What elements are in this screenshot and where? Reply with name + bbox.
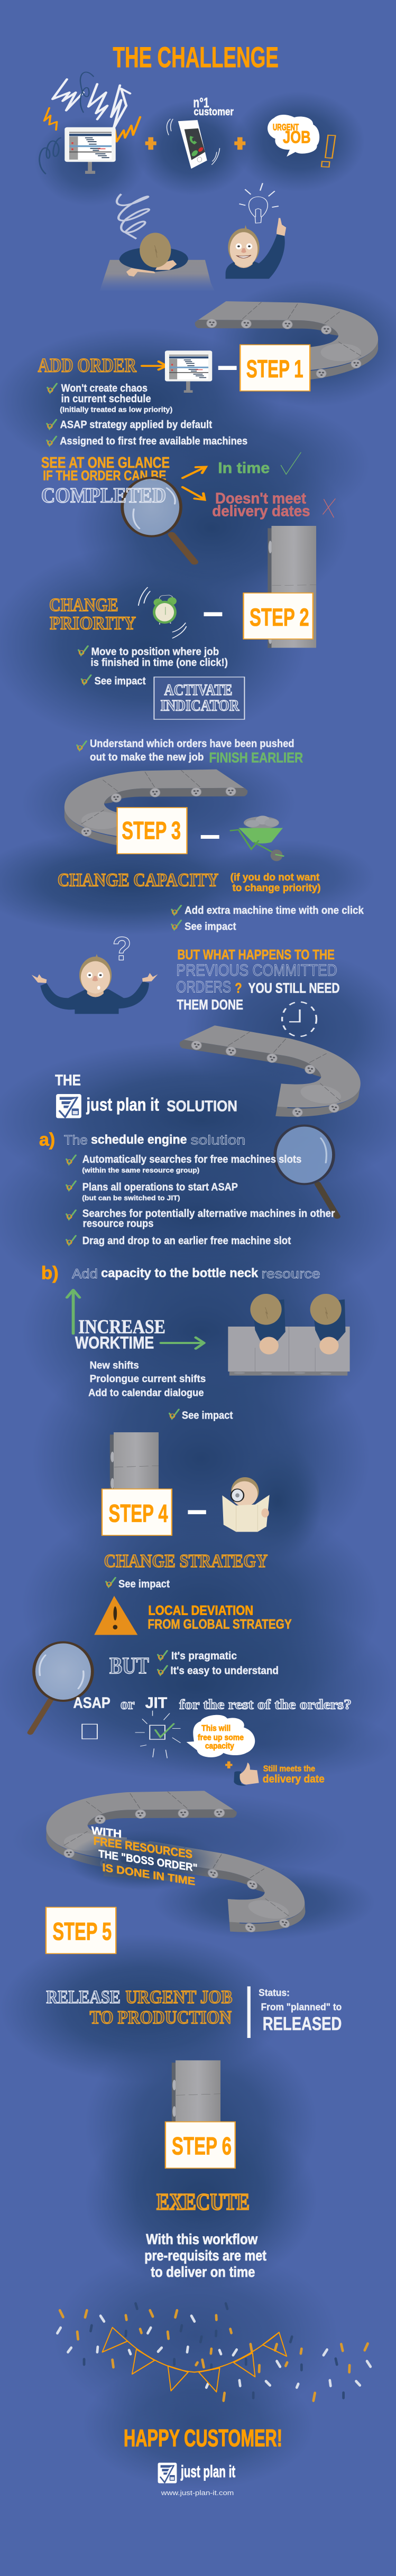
checklist: understand: FINISH EARLIER bbox=[209, 749, 303, 765]
checklist: move and see impact: See impact bbox=[95, 675, 146, 687]
vertical conveyor bbox=[268, 526, 316, 648]
heading: release urgent job to production bbox=[46, 1987, 232, 2027]
text on conveyor: WITH bbox=[91, 1824, 122, 1840]
bunting bbox=[102, 2328, 287, 2392]
icon: question mark: ? bbox=[113, 930, 131, 967]
person: shrugging bbox=[32, 954, 158, 1014]
speech bubble: free up capacity: This will bbox=[201, 1723, 231, 1733]
status: released bbox=[259, 1987, 342, 2034]
list: worktime options: Add to calendar dialogue bbox=[88, 1387, 204, 1399]
vertical conveyor bbox=[172, 2060, 220, 2131]
section: step 2 change priority bbox=[49, 587, 313, 861]
heading: release urgent job to production: RELEASE bbox=[46, 1987, 121, 2007]
outcome: in time bbox=[218, 452, 301, 476]
question: previous committed orders bbox=[176, 947, 339, 1013]
heading: a) schedule engine solution bbox=[39, 1129, 245, 1150]
checklist: pragmatic: It's pragmatic bbox=[171, 1650, 237, 1662]
person: idea, raised finger bbox=[226, 218, 286, 279]
brand: just plan it solution: just plan it bbox=[86, 1095, 159, 1115]
checklist: add order bbox=[47, 382, 247, 447]
heading: see at one glance: IF THE ORDER CAN BE bbox=[43, 468, 166, 483]
icon: wheelbarrow bbox=[230, 816, 284, 861]
arrow: up bbox=[67, 1290, 79, 1333]
icon: thumbs up bbox=[234, 1763, 259, 1786]
arrow: right bbox=[161, 1338, 204, 1349]
heading: completed: COMPLETED bbox=[41, 483, 166, 507]
dash bbox=[188, 1510, 206, 1514]
step 4 badge: STEP 4 bbox=[108, 1499, 168, 1527]
heading: change priority: PRIORITY bbox=[50, 614, 136, 634]
outcome: misses delivery dates: Doesn't meet bbox=[215, 490, 306, 507]
check: see impact: See impact bbox=[182, 1410, 233, 1421]
checkbox: jit checked bbox=[135, 1711, 181, 1758]
checklist: understand bbox=[77, 738, 303, 765]
section: execute and happy customer bbox=[57, 2189, 371, 2497]
checklist: understand: out to make the new job bbox=[90, 752, 204, 763]
heading: change priority bbox=[49, 595, 136, 634]
heading: local deviation from global strategy: LOCAL DEVIATION bbox=[148, 1604, 253, 1618]
section: asap or jit bbox=[30, 1642, 352, 1943]
note: still meets delivery date bbox=[263, 1765, 325, 1785]
speech bubble: urgent job bbox=[268, 115, 319, 156]
button: activate indicator: ACTIVATE bbox=[164, 681, 232, 699]
heading: change priority: CHANGE bbox=[49, 595, 118, 615]
label: but: BUT bbox=[109, 1653, 149, 1679]
person: stressed head on desk bbox=[100, 194, 215, 291]
dash bbox=[204, 612, 222, 616]
warning triangle bbox=[94, 1596, 137, 1635]
question: previous committed orders: THEM DONE bbox=[177, 997, 243, 1013]
list: worktime options: Prolongue current shifts bbox=[90, 1373, 206, 1385]
section: step 1 add order bbox=[38, 301, 378, 648]
icon: dashed clock bbox=[282, 1002, 317, 1036]
website url: www.just-plan-it.com bbox=[161, 2489, 234, 2497]
text: workflow result bbox=[144, 2231, 266, 2280]
checklist: add order: (Initially treated as low priority) bbox=[60, 405, 172, 414]
note: if you do not want to change priority: to change priority) bbox=[232, 882, 321, 894]
step 6 badge bbox=[165, 2122, 235, 2168]
heading: a) schedule engine solution: a) bbox=[39, 1129, 55, 1150]
checklist: add order: ASAP strategy applied by default bbox=[60, 419, 213, 431]
heading: b) add capacity: capacity to the bottle neck bbox=[101, 1266, 259, 1280]
heading: execute: EXECUTE bbox=[156, 2189, 250, 2215]
speech bubble: free up capacity: free up some bbox=[198, 1733, 244, 1742]
heading: local deviation from global strategy bbox=[148, 1604, 292, 1632]
step 2 badge: STEP 2 bbox=[250, 604, 309, 632]
section: just plan it solution bbox=[39, 1094, 350, 1376]
plus bbox=[225, 1762, 232, 1768]
question: previous committed orders: ORDERS bbox=[176, 978, 231, 996]
heading: increase worktime: WORKTIME bbox=[75, 1333, 154, 1352]
heading: release urgent job to production: TO PRODUCTION bbox=[90, 2007, 232, 2027]
checklist: move and see impact: is finished in time (one click!) bbox=[90, 657, 228, 669]
heading: happy customer: HAPPY CUSTOMER! bbox=[124, 2425, 282, 2452]
step 1 badge: STEP 1 bbox=[246, 355, 303, 383]
heading: change capacity: CHANGE CAPACITY bbox=[58, 870, 218, 891]
heading: b) add capacity: b) bbox=[41, 1263, 59, 1283]
text on conveyor: FREE RESOURCES bbox=[94, 1834, 192, 1861]
brand logo: just plan it bbox=[180, 2463, 235, 2481]
section: step 5 release bbox=[46, 1907, 342, 2168]
step 2 badge bbox=[243, 593, 313, 639]
speech bubble: urgent job: URGENT bbox=[273, 122, 299, 133]
step 3 badge bbox=[117, 808, 187, 854]
label: the: THE bbox=[55, 1071, 81, 1089]
text on conveyor bbox=[91, 1824, 198, 1888]
heading: change strategy: CHANGE STRATEGY bbox=[104, 1551, 268, 1571]
arrow: in time bbox=[182, 467, 206, 478]
speech bubble: urgent job: JOB bbox=[283, 128, 311, 147]
label: no.1 customer bbox=[193, 96, 234, 118]
button: activate indicator: INDICATOR bbox=[160, 697, 240, 715]
magnifying glass bbox=[30, 1642, 93, 1732]
checklist: schedule engine: Drag and drop to an earlier free machine slot bbox=[82, 1235, 291, 1247]
question: asap or jit: JIT bbox=[145, 1694, 168, 1711]
check: see impact: See impact bbox=[118, 1578, 170, 1590]
checklist: add order: in current schedule bbox=[61, 393, 151, 405]
conveyor belt bbox=[65, 770, 247, 849]
note: still meets delivery date: delivery date bbox=[263, 1774, 325, 1785]
checklist: capacity: See impact bbox=[185, 921, 236, 932]
step 4 badge bbox=[102, 1489, 172, 1535]
plus bbox=[234, 137, 245, 150]
checklist: schedule engine: (but can be switched to JIT) bbox=[82, 1194, 180, 1202]
text: workflow result: to deliver on time bbox=[151, 2264, 255, 2280]
heading: increase worktime: INCREASE bbox=[78, 1315, 165, 1338]
icon: ringing phone bbox=[167, 119, 220, 169]
button: activate indicator bbox=[154, 677, 244, 719]
question: previous committed orders: ? bbox=[235, 980, 242, 996]
step 1 badge bbox=[240, 345, 310, 391]
speech bubble: free up capacity: capacity bbox=[205, 1741, 234, 1750]
icon: exclamation mark bbox=[321, 135, 335, 167]
heading: b) add capacity bbox=[41, 1263, 320, 1283]
checklist: schedule engine: Plans all operations to start ASAP bbox=[82, 1182, 238, 1193]
question: asap or jit bbox=[73, 1694, 352, 1712]
label: no.1 customer: customer bbox=[194, 106, 234, 118]
icon: schedule monitor bbox=[165, 350, 212, 393]
text on conveyor: THE "BOSS ORDER" bbox=[98, 1848, 198, 1874]
label: no.1 customer: n°1 bbox=[193, 96, 209, 110]
question: asap or jit: ASAP bbox=[73, 1694, 110, 1711]
person: reading with magnifier bbox=[222, 1477, 270, 1532]
icon: light bulb bbox=[239, 183, 279, 223]
icon: schedule monitor bbox=[65, 127, 116, 174]
heading: increase worktime bbox=[75, 1315, 165, 1352]
question: asap or jit: for the rest of the orders? bbox=[179, 1697, 352, 1712]
arrow to monitor bbox=[142, 362, 167, 369]
checklist: add order: Won't create chaos bbox=[61, 382, 148, 394]
heading: release urgent job to production: URGENT JOB bbox=[125, 1987, 232, 2007]
list: worktime options: New shifts bbox=[90, 1359, 139, 1371]
heading: see at one glance bbox=[41, 454, 170, 483]
section: the challenge bbox=[40, 41, 335, 291]
check: see impact bbox=[106, 1578, 170, 1590]
checklist: capacity bbox=[172, 905, 364, 932]
question: asap or jit: or bbox=[121, 1695, 135, 1712]
dash bbox=[201, 835, 219, 839]
icon: alarm clock bbox=[139, 587, 187, 638]
heading: add order: ADD ORDER bbox=[38, 354, 136, 376]
conveyor belt bbox=[170, 1021, 367, 1128]
outcome: misses delivery dates: delivery dates bbox=[212, 503, 310, 520]
step 6 badge: STEP 6 bbox=[172, 2133, 232, 2160]
plus bbox=[145, 137, 156, 150]
brand logo bbox=[158, 2463, 235, 2484]
magnifying glass bbox=[275, 1126, 337, 1217]
brand: just plan it solution: SOLUTION bbox=[167, 1098, 237, 1115]
outcome: misses delivery dates bbox=[212, 490, 335, 520]
text on conveyor: IS DONE IN TIME bbox=[102, 1861, 195, 1888]
text: workflow result: pre-requisits are met bbox=[144, 2247, 266, 2264]
status: released: From "planned" to bbox=[261, 2001, 342, 2012]
note: still meets delivery date: Still meets the bbox=[263, 1765, 315, 1774]
section: step 4 change strategy bbox=[88, 1359, 292, 1635]
list: worktime options bbox=[88, 1359, 206, 1399]
status: released: Status: bbox=[259, 1987, 290, 1998]
checklist: move and see impact bbox=[79, 646, 228, 687]
brand: just plan it solution bbox=[56, 1094, 237, 1118]
magnifying glass bbox=[122, 478, 195, 562]
section: change capacity bbox=[32, 870, 367, 1128]
checklist: pragmatic bbox=[158, 1650, 279, 1676]
heading: b) add capacity: Add bbox=[72, 1266, 98, 1281]
checklist: pragmatic: It's easy to understand bbox=[170, 1665, 279, 1676]
arrow: late bbox=[182, 487, 205, 500]
checklist: schedule engine bbox=[67, 1154, 335, 1247]
vertical conveyor bbox=[110, 1432, 159, 1503]
speech bubble: free up capacity bbox=[187, 1715, 255, 1757]
note: if you do not want to change priority bbox=[231, 872, 321, 894]
checkbox: asap bbox=[82, 1724, 97, 1739]
checklist: schedule engine: resource roups bbox=[83, 1218, 153, 1230]
scribbles: chaos around schedule bbox=[40, 72, 140, 174]
step 5 badge bbox=[46, 1907, 116, 1953]
checklist: schedule engine: (within the same resource group) bbox=[82, 1166, 199, 1174]
divider bar bbox=[247, 1986, 251, 2038]
step 5 badge: STEP 5 bbox=[52, 1918, 112, 1945]
S-shaped conveyor belt bbox=[46, 1791, 308, 1943]
step 3 badge: STEP 3 bbox=[122, 817, 181, 845]
heading: b) add capacity: resource bbox=[261, 1266, 320, 1281]
two workers at desks bbox=[228, 1294, 350, 1376]
heading: see at one glance: SEE AT ONE GLANCE bbox=[41, 454, 170, 471]
confetti bbox=[57, 2304, 371, 2401]
text: workflow result: With this workflow bbox=[146, 2231, 257, 2247]
note: if you do not want to change priority: (if you do not want bbox=[231, 872, 319, 883]
checklist: move and see impact: Move to position where job bbox=[91, 646, 219, 657]
heading: a) schedule engine solution: schedule engine bbox=[91, 1133, 187, 1147]
heading: local deviation from global strategy: FROM GLOBAL STRATEGY bbox=[148, 1617, 292, 1632]
heading: a) schedule engine solution: solution bbox=[191, 1133, 245, 1147]
conveyor belt bbox=[195, 301, 378, 381]
heading: a) schedule engine solution: The bbox=[64, 1133, 88, 1147]
checklist: add order: Assigned to first free available machines bbox=[60, 435, 247, 447]
dash bbox=[218, 366, 237, 370]
check: see impact bbox=[170, 1410, 233, 1421]
outcome: in time: In time bbox=[218, 459, 270, 476]
